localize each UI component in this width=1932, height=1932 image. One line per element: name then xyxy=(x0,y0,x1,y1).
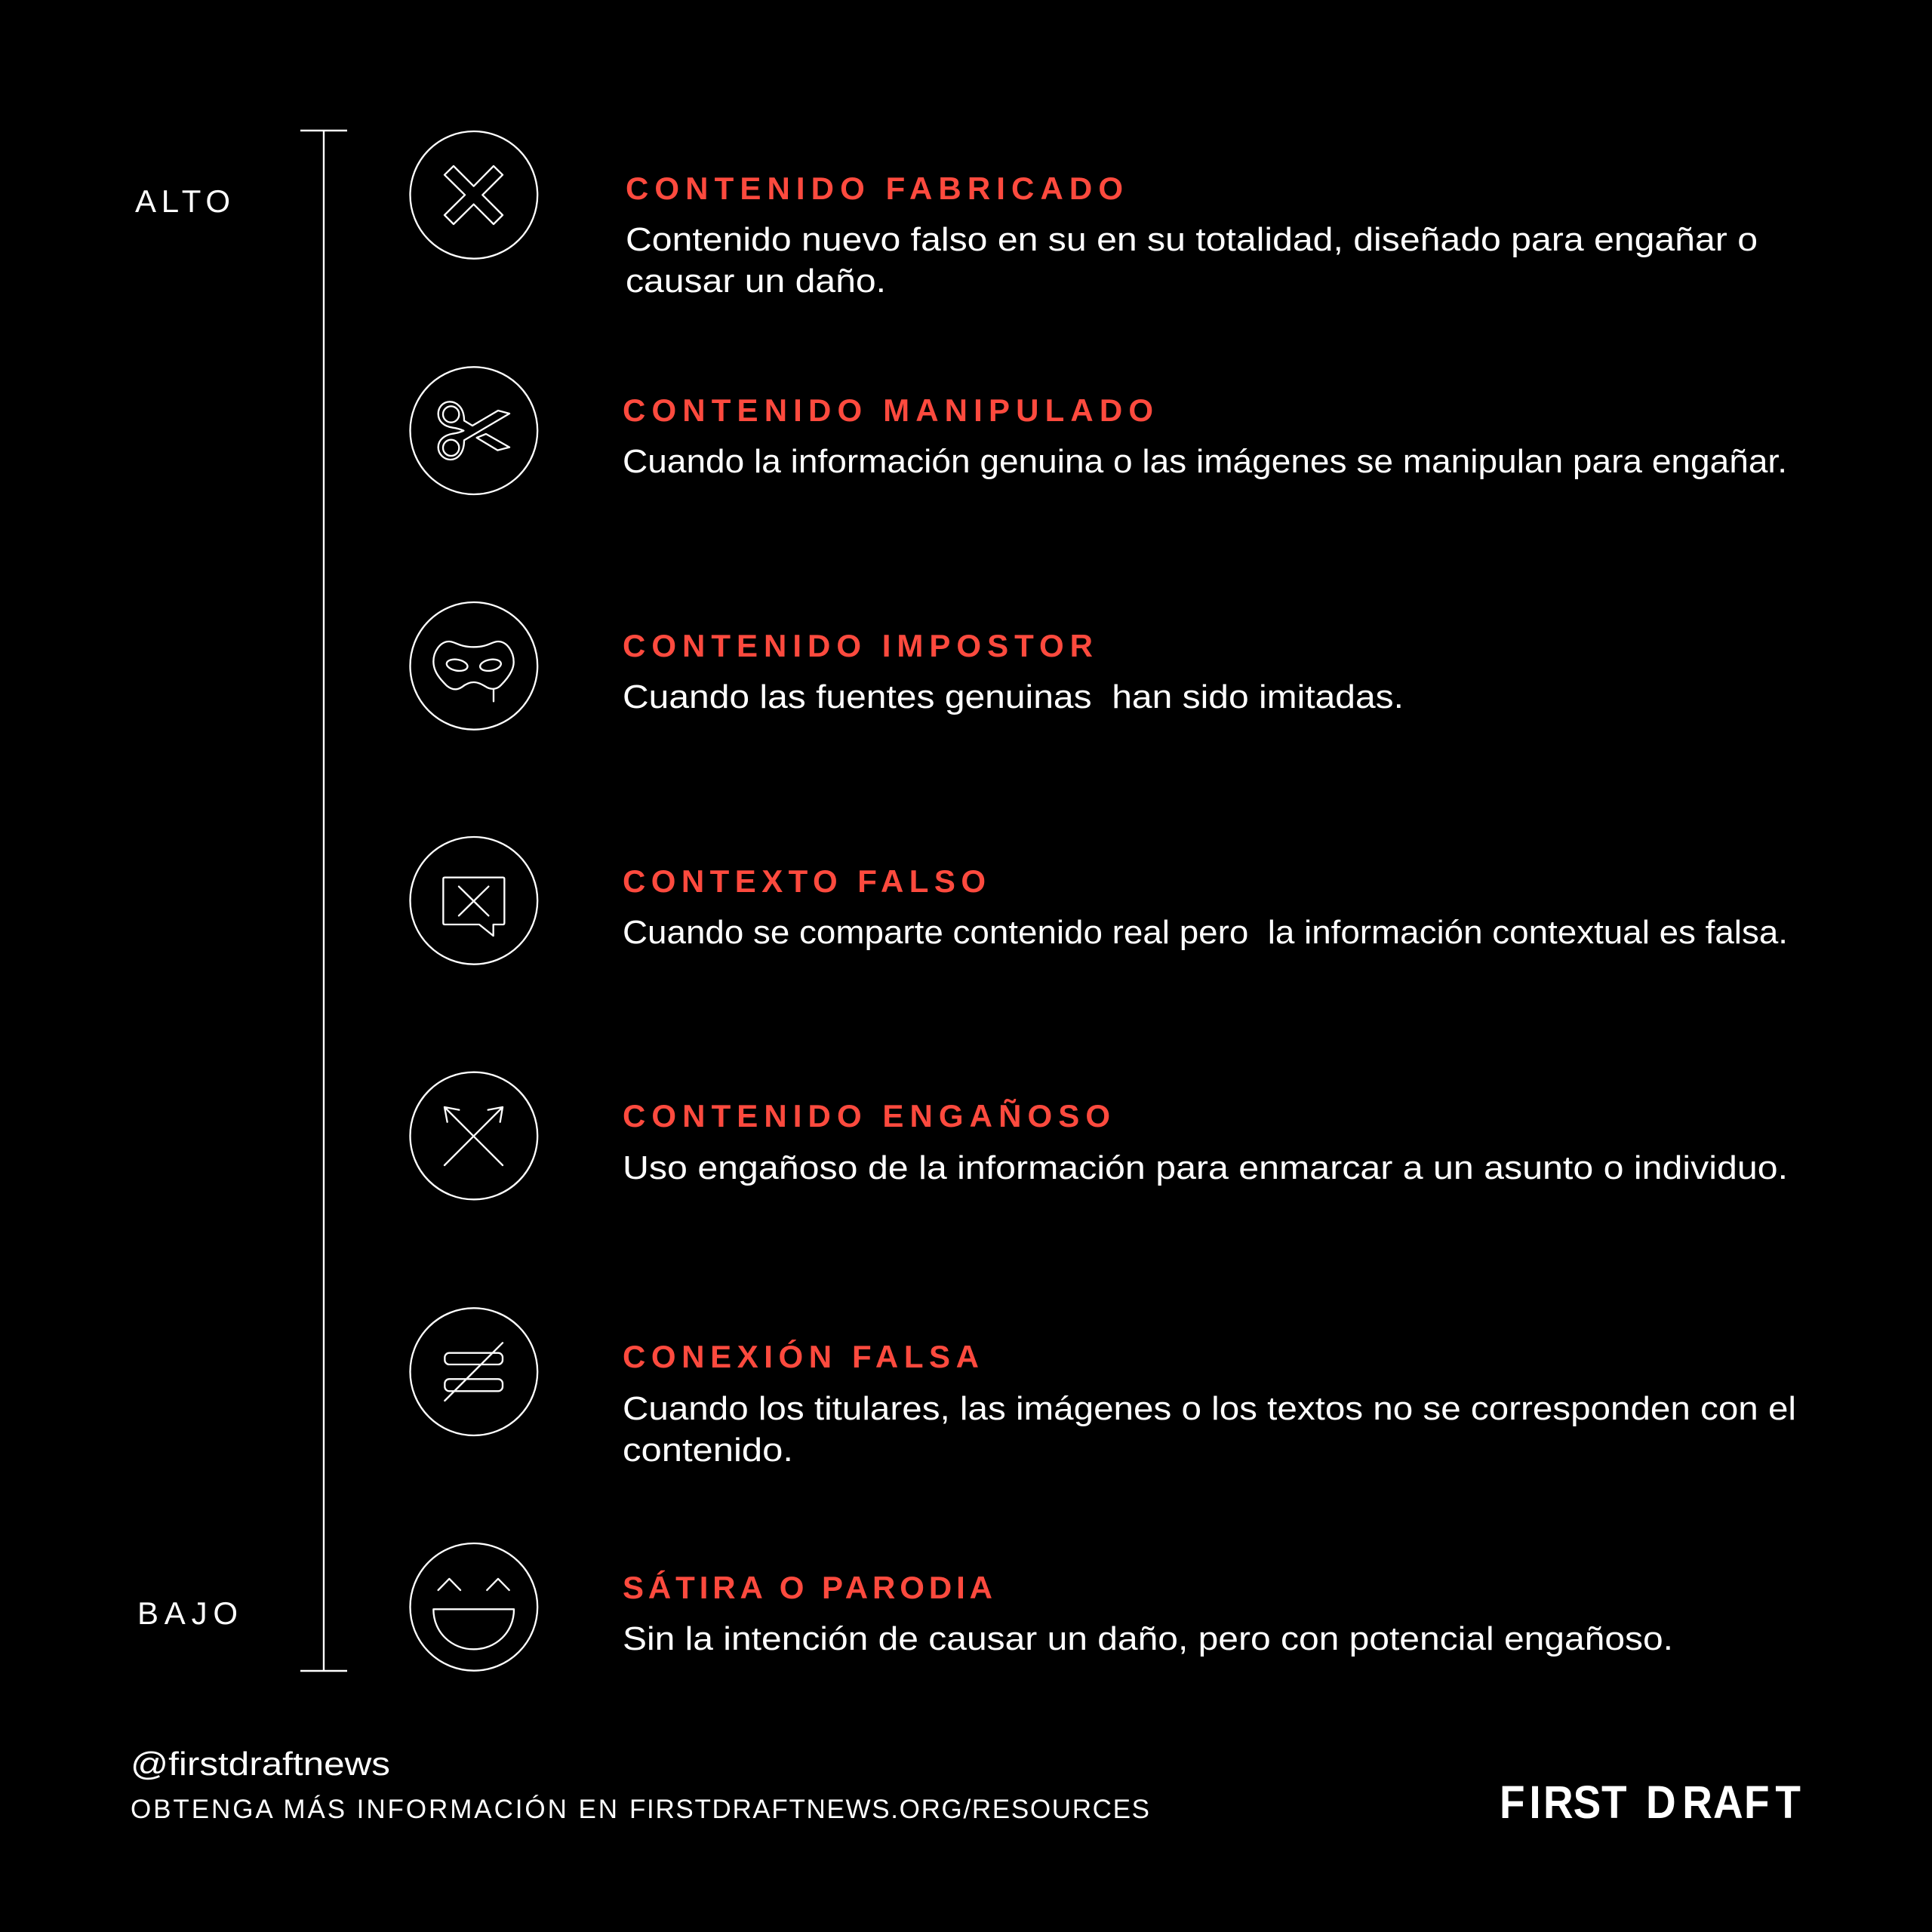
label: alto: ALTO xyxy=(135,183,230,219)
label: bajo: BAJO xyxy=(137,1595,238,1631)
heading: CONTENIDO IMPOSTOR xyxy=(623,628,1093,663)
panel: contenido impostor xyxy=(410,602,1404,730)
description: Cuando los titulares, las imágenes o los textos no se corresponden con el xyxy=(623,1390,1796,1427)
heading: CONTEXTO FALSO xyxy=(623,863,986,899)
description xyxy=(623,1390,1796,1469)
scale: high to low axis xyxy=(135,131,347,1671)
description: Contenido nuevo falso en su en su totalidad, diseñado para engañar o xyxy=(626,221,1758,258)
axis bar xyxy=(300,131,347,1671)
panel: contenido manipulado xyxy=(410,367,1787,494)
logo: first draft: FIRST DRAFT xyxy=(1500,1777,1801,1829)
resources link: FIRSTDRAFTNEWS.ORG/RESOURCES xyxy=(629,1795,1149,1824)
panel: conexion falsa xyxy=(410,1308,1796,1469)
icon: scissors xyxy=(410,367,537,494)
resources link xyxy=(131,1795,1149,1824)
description: causar un daño. xyxy=(626,263,886,300)
icon: struck-through bars xyxy=(410,1308,537,1435)
heading: CONTENIDO FABRICADO xyxy=(626,171,1123,206)
panel: contenido fabricado xyxy=(410,131,1758,300)
description xyxy=(626,221,1758,300)
description: Uso engañoso de la información para enmarcar a un asunto o individuo. xyxy=(623,1149,1788,1186)
icon: crossed arrows xyxy=(410,1072,537,1199)
icon: laughing face xyxy=(410,1543,537,1671)
description: Cuando la información genuina o las imágenes se manipulan para engañar. xyxy=(623,443,1787,480)
panel: contenido enganoso xyxy=(410,1072,1788,1199)
description: contenido. xyxy=(623,1432,793,1469)
heading: SÁTIRA O PARODIA xyxy=(623,1570,992,1605)
description: Sin la intención de causar un daño, pero con potencial engañoso. xyxy=(623,1620,1673,1657)
icon: speech bubble with cross xyxy=(410,837,537,964)
panel: contexto falso xyxy=(410,837,1788,964)
icon: cross xyxy=(410,131,537,259)
social handle: @firstdraftnews xyxy=(131,1746,390,1783)
icon: mask xyxy=(410,602,537,730)
heading: CONEXIÓN FALSA xyxy=(623,1338,979,1374)
description: Cuando las fuentes genuinas han sido imitadas. xyxy=(623,678,1404,715)
heading: CONTENIDO MANIPULADO xyxy=(623,392,1153,428)
footer xyxy=(131,1746,1801,1829)
heading: CONTENIDO ENGAÑOSO xyxy=(623,1098,1110,1134)
resources link: OBTENGA MÁS INFORMACIÓN EN xyxy=(131,1795,617,1824)
panel: satira o parodia xyxy=(410,1543,1673,1671)
description: Cuando se comparte contenido real pero la información contextual es falsa. xyxy=(623,914,1788,951)
